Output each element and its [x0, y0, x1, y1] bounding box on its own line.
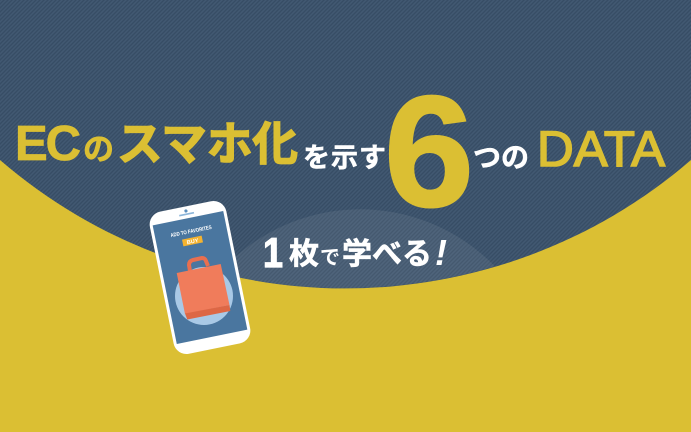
title: を示す: を示す [303, 143, 386, 173]
title: スマホ化: スマホ化 [117, 118, 298, 170]
subtitle: exclamation: ! [435, 232, 447, 273]
blue circle [175, 267, 233, 325]
title: DATA: DATA [537, 121, 666, 177]
title: つの: つの [473, 142, 529, 173]
subtitle: 学べる: 学べる [342, 238, 432, 271]
bag handle [189, 258, 208, 271]
subtitle [263, 229, 447, 276]
buy button: BUY [186, 238, 199, 246]
title [15, 64, 666, 240]
subtitle: で: で [320, 247, 340, 269]
title: EC: EC [15, 117, 81, 171]
phone body [147, 199, 253, 356]
subtitle: 枚: 枚 [289, 238, 319, 271]
phone speaker [178, 208, 194, 216]
title: big number 6: 6 [384, 64, 474, 240]
striped navy arc panel [0, 0, 691, 288]
lighter subtitle ellipse [219, 209, 495, 288]
icon: smartphone [147, 199, 253, 356]
bag front [177, 264, 230, 314]
phone screen [153, 211, 247, 344]
bag bottom strip [185, 305, 230, 320]
title: の: の [83, 132, 114, 167]
buy button [182, 236, 203, 247]
screen heading: ADD TO FAVORITES [170, 225, 213, 239]
subtitle: 1: 1 [263, 229, 283, 276]
